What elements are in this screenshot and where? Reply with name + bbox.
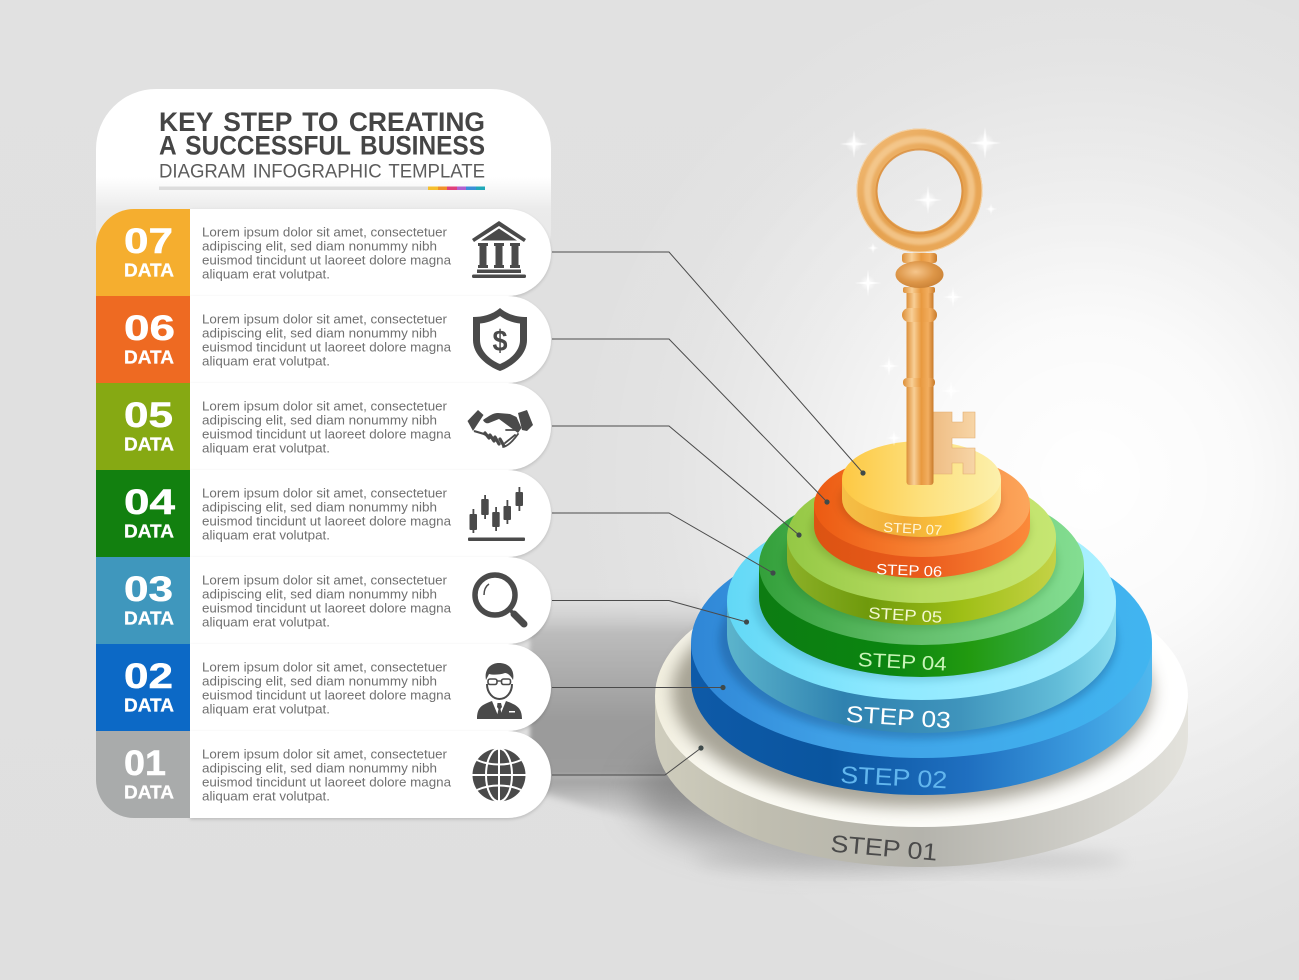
tab 04: 04 [124,483,176,522]
shaft collars [896,253,944,387]
tab 03 [96,557,190,644]
podium disc: step 02 [672,528,1152,807]
title: DIAGRAM INFOGRAPHIC TEMPLATE [159,160,485,182]
tab 04 [96,470,190,557]
text 05: aliquam erat volutpat. [202,440,330,456]
tab 05: DATA [124,434,174,454]
leader 03 [552,600,746,622]
panel: header card [96,89,551,289]
podium disc: step 03 [719,502,1117,739]
text 01: euismod tincidunt ut laoreet dolore magna [202,774,452,790]
text 06: euismod tincidunt ut laoreet dolore magna [202,340,452,354]
icon: globe [472,748,526,802]
leader 01 [552,748,701,775]
text 07: aliquam erat volutpat. [202,266,330,282]
tab 01: 01 [124,744,166,783]
text 03 [202,572,452,630]
label: step 04: STEP 04 [857,649,947,676]
label: step 07: STEP 07 [883,520,943,538]
panel: row 06 [96,296,551,383]
text 07: Lorem ipsum dolor sit amet, consectetuer [202,224,448,240]
tab 07: DATA [124,260,174,280]
panel: row 02 [96,644,551,731]
tab 01: DATA [124,782,174,802]
text 02: Lorem ipsum dolor sit amet, consectetuer [202,660,448,674]
icon: magnifying glass [475,575,524,624]
text 02: adipiscing elit, sed diam nonummy nibh [202,674,437,688]
tab 06: 06 [124,309,175,348]
podium disc: step 05 [783,471,1057,628]
icon: bank [472,221,526,278]
text 04: euismod tincidunt ut laoreet dolore magna [202,514,452,528]
text 03: euismod tincidunt ut laoreet dolore magna [202,600,452,616]
tab 06: DATA [124,346,174,368]
label: step 03: STEP 03 [845,701,952,733]
tab 02: DATA [124,694,174,716]
title [159,107,485,182]
text 05 [202,398,452,456]
key shaft [906,290,934,485]
icon: candlestick chart [468,487,525,541]
tab 02: 02 [124,657,173,696]
tab 03: 03 [124,570,173,609]
leader 04 [552,513,773,573]
tab 05: 05 [124,396,173,435]
tab 01 [96,731,190,818]
tab 03: DATA [124,608,174,628]
text 05: euismod tincidunt ut laoreet dolore magna [202,426,452,442]
text 02: aliquam erat volutpat. [202,702,330,716]
text 04: Lorem ipsum dolor sit amet, consectetuer [202,486,448,500]
podium disc: step 06 [810,453,1030,581]
panel: row 03 [96,557,551,644]
icon: handshake [468,410,533,447]
label: step 06: STEP 06 [876,562,942,581]
text 06: aliquam erat volutpat. [202,354,330,368]
text 06 [202,312,452,368]
text 04: adipiscing elit, sed diam nonummy nibh [202,500,437,514]
tab 05 [96,383,190,470]
text 02: euismod tincidunt ut laoreet dolore magna [202,688,452,702]
text 06: Lorem ipsum dolor sit amet, consectetuer [202,312,448,326]
title underline [159,186,485,190]
text 05: adipiscing elit, sed diam nonummy nibh [202,412,437,428]
label: step 05: STEP 05 [868,605,943,627]
golden key [840,127,1001,485]
text 01: aliquam erat volutpat. [202,788,330,804]
leader dots [698,470,866,751]
text 02 [202,660,452,716]
text 07: euismod tincidunt ut laoreet dolore magna [202,252,452,268]
leader 06 [552,339,827,502]
text 07 [202,224,452,282]
text 01: Lorem ipsum dolor sit amet, consectetuer [202,746,448,762]
key bit [933,412,975,474]
leader lines [552,252,863,775]
text 03: Lorem ipsum dolor sit amet, consectetuer [202,572,448,588]
panel: row 05 [96,383,551,470]
title: A SUCCESSFUL BUSINESS [159,130,485,160]
sparkles [840,127,1001,446]
icon: businessman [477,663,522,719]
text 05: Lorem ipsum dolor sit amet, consectetuer [202,398,448,414]
text 06: adipiscing elit, sed diam nonummy nibh [202,326,437,340]
text 03: adipiscing elit, sed diam nonummy nibh [202,586,437,602]
text 04 [202,486,452,542]
label: step 02: STEP 02 [840,762,948,794]
icon: dollar shield: $ [492,325,508,358]
floor shadow behind the podium [530,592,1125,873]
icon: dollar shield [473,308,527,371]
label: step 01: STEP 01 [829,831,938,867]
panel: row 01 [96,731,551,818]
podium disc: step 07 [839,441,1001,539]
tab 02 [96,644,190,731]
tab 04: DATA [124,520,174,542]
text 03: aliquam erat volutpat. [202,614,330,630]
tab 07 [96,209,190,296]
tab 07: 07 [124,222,173,261]
podium disc: step 01 [655,565,1188,867]
text 01: adipiscing elit, sed diam nonummy nibh [202,760,437,776]
text 07: adipiscing elit, sed diam nonummy nibh [202,238,437,254]
text 01 [202,746,452,804]
tab 06 [96,296,190,383]
leader 05 [552,426,799,535]
leader 07 [552,252,863,473]
title: KEY STEP TO CREATING [159,107,485,137]
leader 02 [552,686,723,688]
panel: row 04 [96,470,551,557]
key ring [857,129,982,252]
podium disc: step 04 [753,485,1085,681]
panel: row 07 [96,209,551,296]
text 04: aliquam erat volutpat. [202,528,330,542]
